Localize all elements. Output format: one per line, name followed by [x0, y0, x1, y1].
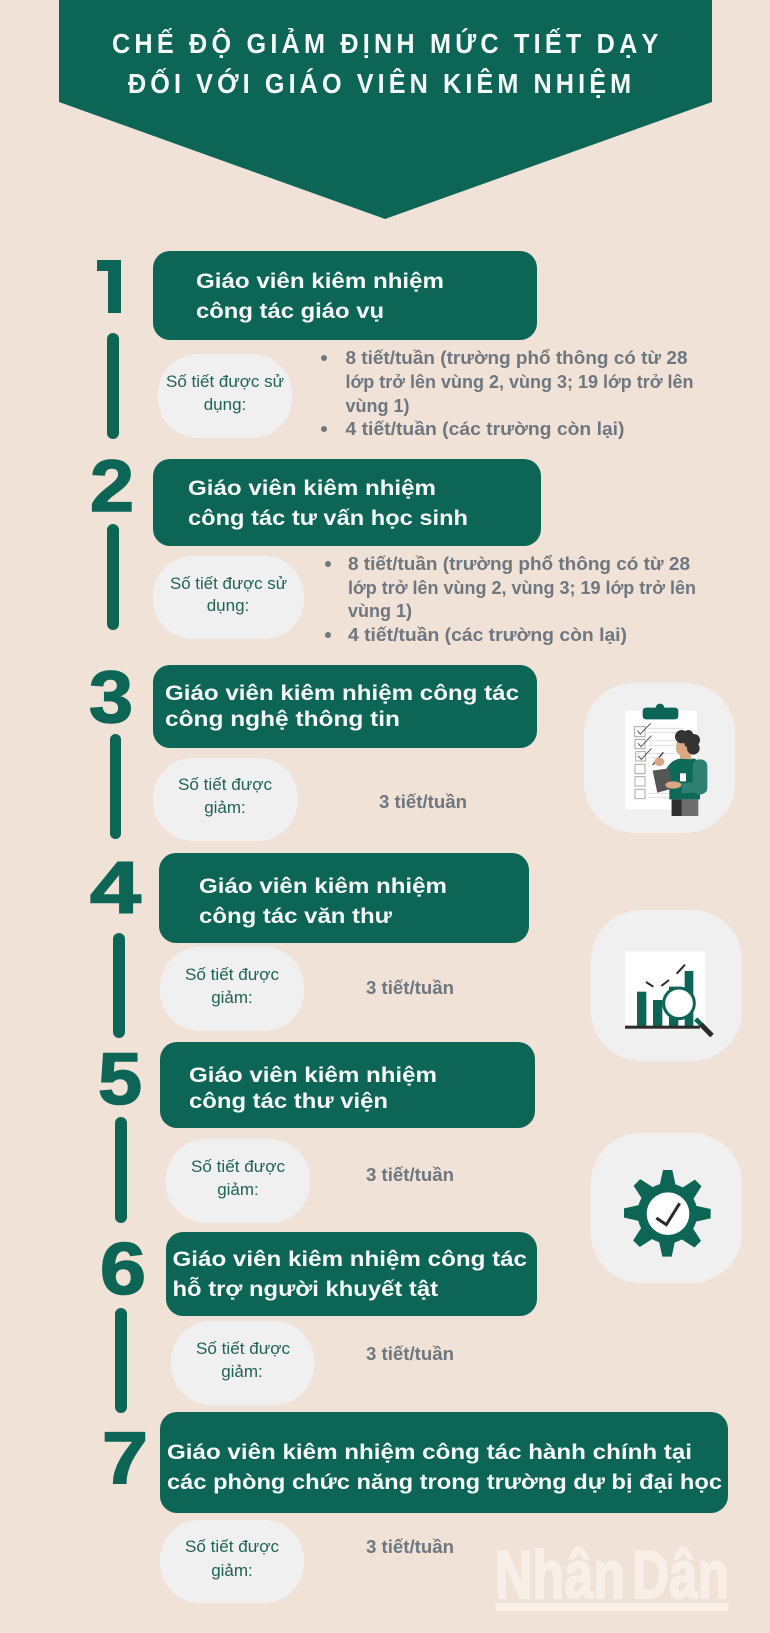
section 6 [100, 1229, 537, 1413]
details 2: 4 tiết/tuần (các trường còn lại) [348, 625, 627, 645]
value 6: 3 tiết/tuần [366, 1344, 454, 1364]
watermark: Nhân [495, 1537, 625, 1613]
icon: chart magnifier [591, 910, 742, 1061]
heading 5 [160, 1042, 535, 1128]
heading 5: Giáo viên kiêm nhiệm [189, 1063, 437, 1087]
heading 4 [159, 853, 529, 943]
value 5: 3 tiết/tuần [366, 1165, 454, 1185]
label 5 [166, 1139, 310, 1223]
details 1: 4 tiết/tuần (các trường còn lại) [346, 419, 624, 439]
label 5: Số tiết được [191, 1157, 285, 1176]
title banner [59, 0, 712, 219]
heading 2: công tác tư vấn học sinh [188, 506, 468, 530]
label 3: Số tiết được [178, 775, 272, 794]
connector 3 [110, 734, 121, 839]
details 2: 8 tiết/tuần (trường phổ thông có từ 28 [348, 554, 690, 574]
label 4 [160, 947, 304, 1031]
heading 3: công nghệ thông tin [165, 707, 400, 731]
value 7: 3 tiết/tuần [366, 1537, 454, 1557]
heading 4: công tác văn thư [199, 904, 392, 928]
label 7: giảm: [211, 1561, 253, 1580]
icon: checklist person [584, 683, 735, 833]
label 6: Số tiết được [196, 1339, 290, 1358]
heading 1: Giáo viên kiêm nhiệm [196, 269, 444, 293]
connector 1 [107, 333, 119, 439]
label 3 [153, 758, 298, 841]
number 5: 5 [98, 1039, 142, 1120]
number 3: 3 [89, 657, 133, 738]
heading 6: Giáo viên kiêm nhiệm công tác [172, 1247, 527, 1271]
label 6: giảm: [221, 1362, 263, 1381]
label 2: Số tiết được sử [170, 574, 287, 593]
number 2: 2 [90, 446, 134, 527]
title: ĐỐI VỚI GIÁO VIÊN KIÊM NHIỆM [128, 68, 631, 99]
label 3: giảm: [204, 798, 246, 817]
details 1 [321, 348, 694, 439]
details 2 [325, 554, 696, 645]
icon: gear check [591, 1133, 742, 1283]
details 1: lớp trở lên vùng 2, vùng 3; 19 lớp trở lên [346, 372, 694, 392]
heading 5: công tác thư viện [189, 1089, 388, 1113]
details 1: 8 tiết/tuần (trường phổ thông có từ 28 [346, 348, 688, 368]
label 1: dụng: [204, 395, 246, 414]
heading 6 [166, 1232, 537, 1316]
label 2: dụng: [207, 596, 249, 615]
label 7: Số tiết được [185, 1537, 279, 1556]
details 1: vùng 1) [346, 396, 410, 416]
number 1: 1 [92, 248, 133, 329]
section 2 [90, 446, 696, 645]
label 1: Số tiết được sử [166, 372, 284, 391]
label 6 [171, 1321, 314, 1405]
heading 6: hỗ trợ người khuyết tật [172, 1276, 438, 1301]
section 7 [102, 1412, 728, 1603]
label 4: giảm: [211, 988, 253, 1007]
label 7 [160, 1520, 304, 1603]
heading 1 [153, 251, 537, 340]
connector 6 [115, 1308, 127, 1413]
label 5: giảm: [217, 1180, 259, 1199]
heading 3: Giáo viên kiêm nhiệm công tác [165, 681, 519, 705]
section 4 [90, 848, 529, 1038]
label 4: Số tiết được [185, 965, 279, 984]
number 4: 4 [90, 848, 141, 929]
value 4: 3 tiết/tuần [366, 978, 454, 998]
details 2: lớp trở lên vùng 2, vùng 3; 19 lớp trở lên [348, 578, 696, 598]
number 6: 6 [100, 1229, 146, 1310]
section 5 [98, 1039, 535, 1223]
heading 7: Giáo viên kiêm nhiệm công tác hành chính tại [167, 1440, 692, 1464]
heading 2 [153, 459, 541, 546]
title [112, 28, 659, 99]
details 2: vùng 1) [348, 601, 412, 621]
section 1 [92, 248, 694, 439]
heading 7 [160, 1412, 728, 1513]
connector 2 [107, 524, 119, 630]
heading 4: Giáo viên kiêm nhiệm [199, 874, 447, 898]
heading 2: Giáo viên kiêm nhiệm [188, 476, 436, 500]
title: CHẾ ĐỘ GIẢM ĐỊNH MỨC TIẾT DẠY [112, 28, 659, 59]
heading 3 [153, 665, 537, 748]
number 1 [97, 260, 121, 313]
number 7: 7 [102, 1418, 148, 1499]
label 1 [158, 354, 292, 438]
heading 1: công tác giáo vụ [196, 299, 384, 323]
watermark: Dân [632, 1537, 729, 1613]
section 3 [89, 657, 537, 841]
label 2 [153, 556, 304, 639]
connector 5 [115, 1117, 127, 1223]
heading 7: các phòng chức năng trong trường dự bị đại học [167, 1470, 722, 1494]
connector 4 [113, 933, 125, 1038]
value 3: 3 tiết/tuần [379, 792, 467, 812]
